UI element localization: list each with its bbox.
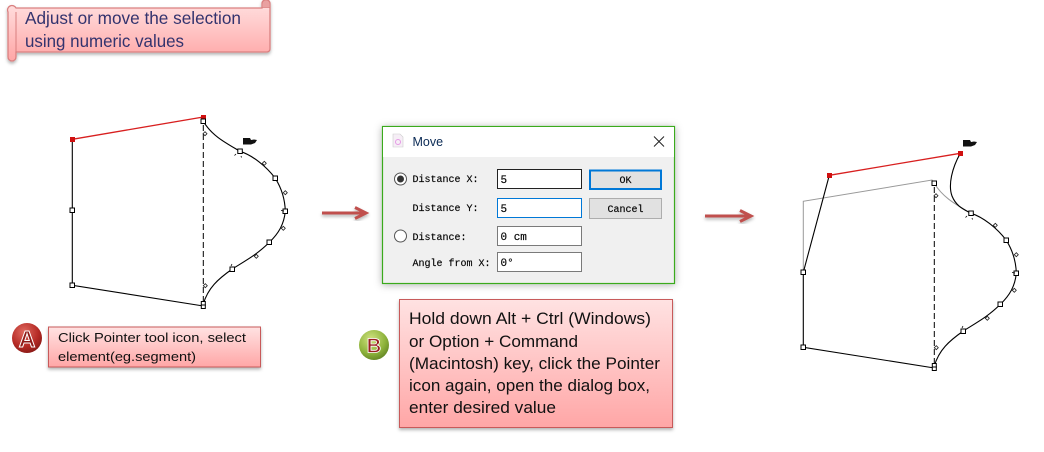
- callout B: (Macintosh) key, click the Pointer: [409, 355, 661, 373]
- radio: Distance X: [394, 173, 406, 185]
- button: OK: OK: [619, 176, 632, 187]
- input: Distance Y: [498, 198, 582, 218]
- callout A: [48, 327, 260, 367]
- button: Cancel: Cancel: [607, 204, 644, 216]
- pattern diagram B: moved segment: [801, 140, 1018, 370]
- callout B: icon again, open the dialog box,: [409, 377, 650, 395]
- dialog title: Move: [412, 135, 443, 149]
- field labels: [412, 174, 491, 270]
- pattern diagram A: selected segment: [70, 115, 288, 308]
- input: Angle: 0°: [500, 258, 514, 270]
- dialog: Move: [382, 126, 674, 284]
- icon: pointer cursor: [243, 138, 257, 144]
- title: Adjust or move the selection: [25, 8, 241, 28]
- field labels: Distance Y:: [412, 203, 479, 215]
- callout A: element(eg.segment): [58, 350, 196, 364]
- title: using numeric values: [25, 31, 184, 51]
- badge A: A: [19, 326, 35, 352]
- input: Distance: [498, 226, 582, 246]
- icon: pointer cursor: [963, 140, 977, 146]
- callout B: or Option + Command: [409, 333, 578, 351]
- field labels: Distance:: [412, 232, 467, 244]
- icon: close: [654, 136, 664, 146]
- input: Angle: [498, 252, 582, 272]
- button: OK: [590, 170, 661, 189]
- banner: scroll title: [8, 0, 270, 61]
- callout B: enter desired value: [409, 399, 556, 417]
- badge A: [12, 323, 42, 353]
- input: Distance: 0 cm: [500, 232, 527, 244]
- field labels: Distance X:: [412, 174, 479, 186]
- button: Cancel: [590, 198, 662, 218]
- callout B: Hold down Alt + Ctrl (Windows): [409, 310, 651, 328]
- arrow: A to dialog: [322, 208, 366, 218]
- icon: dialog file: [393, 134, 403, 147]
- input: Distance Y: 5: [500, 204, 507, 216]
- radio: Distance: [394, 230, 406, 242]
- field labels: Angle from X:: [412, 258, 491, 270]
- arrow: dialog to result: [705, 210, 751, 222]
- callout B: [400, 300, 672, 428]
- badge B: B: [367, 336, 381, 358]
- input: Distance X: 5: [500, 175, 507, 187]
- input: Distance X: [498, 170, 582, 188]
- callout A: Click Pointer tool icon, select: [58, 331, 247, 345]
- badge B: [359, 330, 389, 360]
